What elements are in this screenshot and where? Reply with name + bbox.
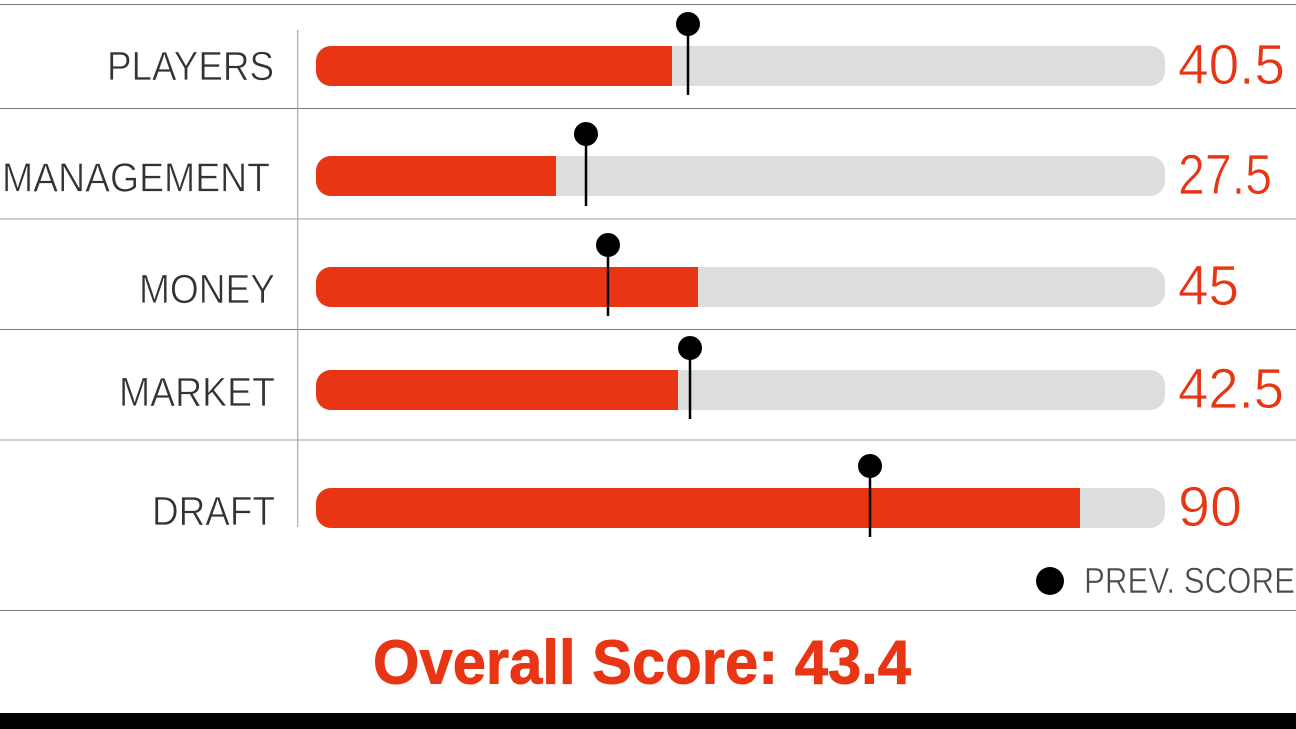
- bar: players: [316, 46, 672, 86]
- marker: market previous score: [678, 336, 702, 419]
- overall score: Overall Score: 43.4: [373, 628, 911, 698]
- value: market: 42.5: [1178, 357, 1284, 421]
- track: market: [316, 370, 1165, 410]
- legend: previous score: [1036, 560, 1295, 601]
- bar: money: [316, 267, 698, 307]
- track: money: [316, 267, 1165, 307]
- row: players: [107, 12, 1285, 97]
- row: draft: [152, 454, 1242, 539]
- label: money: MONEY: [139, 266, 275, 312]
- value: players: 40.5: [1178, 33, 1285, 97]
- bottom black band: [0, 713, 1296, 729]
- legend dot: [1036, 567, 1064, 595]
- track: management: [316, 156, 1165, 196]
- value: money: 45: [1178, 254, 1239, 318]
- value: draft: 90: [1178, 475, 1242, 539]
- label: draft: DRAFT: [152, 488, 275, 534]
- bar: draft: [316, 488, 1080, 528]
- marker: management previous score: [574, 122, 598, 206]
- marker: money previous score: [596, 233, 620, 316]
- label: market: MARKET: [119, 369, 275, 415]
- value: management: 27.5: [1178, 143, 1272, 207]
- row: management: [2, 122, 1272, 207]
- track: draft: [316, 488, 1165, 528]
- marker: players previous score: [676, 12, 700, 95]
- marker: draft previous score: [858, 454, 882, 537]
- row: market: [119, 336, 1284, 421]
- label: management: MANAGEMENT: [2, 154, 270, 200]
- bar: market: [316, 370, 678, 410]
- track: players: [316, 46, 1165, 86]
- row: money: [139, 233, 1239, 318]
- label: players: PLAYERS: [107, 43, 274, 89]
- bar: management: [316, 156, 556, 196]
